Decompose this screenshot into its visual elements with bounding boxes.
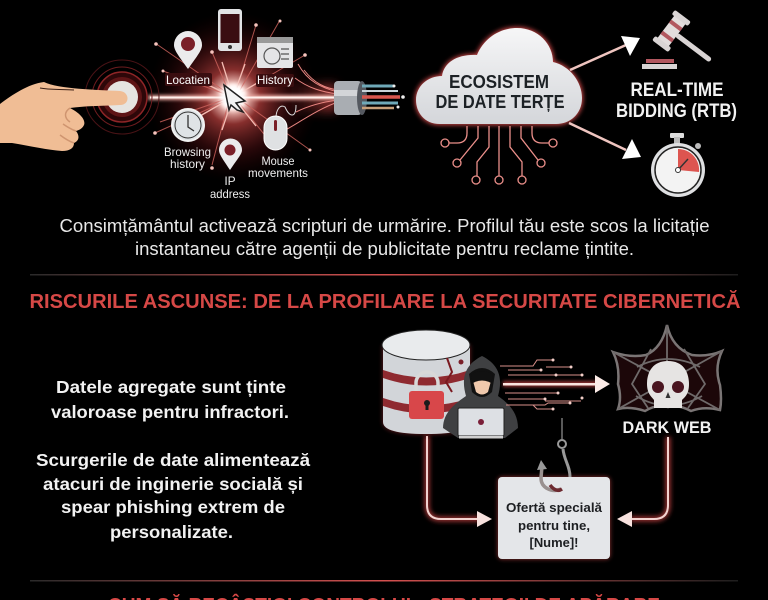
icon: spider web with skull	[613, 325, 722, 411]
icon: breached database	[382, 330, 470, 434]
icon: IP pin	[219, 139, 242, 170]
label: location: Locatien	[166, 73, 210, 87]
arrow: database to phishing card	[427, 436, 492, 527]
paragraph: consent explanation: instantaneu către agenții de publicitate pentru reclame țintite.	[135, 239, 634, 259]
arrow: cloud to stopwatch	[569, 123, 641, 159]
divider	[30, 580, 738, 582]
heading: hidden risks: RISCURILE ASCUNSE: DE LA PROFILARE LA SECURITATE CIBERNETICĂ	[30, 290, 741, 313]
arrow: data flow to dark web	[500, 358, 610, 410]
icon: hooded hacker	[443, 356, 518, 438]
icon: fiber-optic cable	[334, 81, 405, 115]
label: real-time bidding: REAL-TIME	[630, 80, 724, 101]
icon: hand pressing button	[0, 60, 159, 151]
icon: stopwatch	[651, 133, 705, 197]
cloud label: ECOSISTEM	[449, 72, 549, 92]
text block: risks: valoroase pentru infractori.	[51, 402, 289, 422]
label: IP address: IP	[224, 174, 236, 188]
hand	[0, 82, 128, 151]
card: phishing offer: pentru tine,	[518, 518, 590, 533]
card: phishing offer: [Nume]!	[530, 535, 578, 550]
icon: clock	[172, 109, 204, 141]
label: IP address: address	[210, 187, 250, 201]
label: history: History	[257, 73, 293, 87]
cloud label: DE DATE TERȚE	[436, 92, 564, 112]
data burst	[148, 12, 338, 182]
arrow: cloud to RTB	[570, 36, 640, 70]
label: browsing history: history	[170, 157, 205, 171]
icon: fishing hook	[537, 418, 570, 490]
divider	[30, 274, 738, 276]
text block: risks: Datele agregate sunt ținte	[56, 377, 286, 397]
icon: cursor arrow	[224, 85, 245, 112]
text block: risks: atacuri de inginerie socială și	[43, 474, 303, 494]
card: phishing offer: Ofertă specială	[506, 500, 603, 515]
icon: location pin	[174, 31, 202, 69]
skull	[647, 361, 689, 408]
icon: smartphone	[218, 9, 242, 51]
card: phishing offer	[498, 477, 610, 559]
label: mouse movements: movements	[248, 166, 308, 180]
padlock	[416, 372, 438, 392]
circuit traces	[441, 126, 557, 184]
button rings	[85, 60, 159, 134]
paragraph: consent explanation: Consimțământul activează scripturi de urmărire. Profilul tău este scos la licitație	[60, 216, 710, 236]
label: mouse movements: Mouse	[262, 154, 295, 168]
cloud: third-party data ecosystem	[416, 28, 582, 124]
icon: browser window	[257, 37, 293, 68]
text block: risks: spear phishing extrem de	[61, 497, 285, 517]
text block: risks: personalizate.	[110, 522, 233, 542]
label: dark web: DARK WEB	[622, 418, 712, 437]
icon: mouse	[264, 105, 296, 150]
icon: gavel	[642, 10, 722, 76]
text block: risks: Scurgerile de date alimentează	[36, 450, 310, 470]
label: real-time bidding: BIDDING (RTB)	[616, 101, 737, 122]
arrow: dark web to phishing card	[617, 437, 668, 527]
label: browsing history: Browsing	[164, 145, 211, 159]
